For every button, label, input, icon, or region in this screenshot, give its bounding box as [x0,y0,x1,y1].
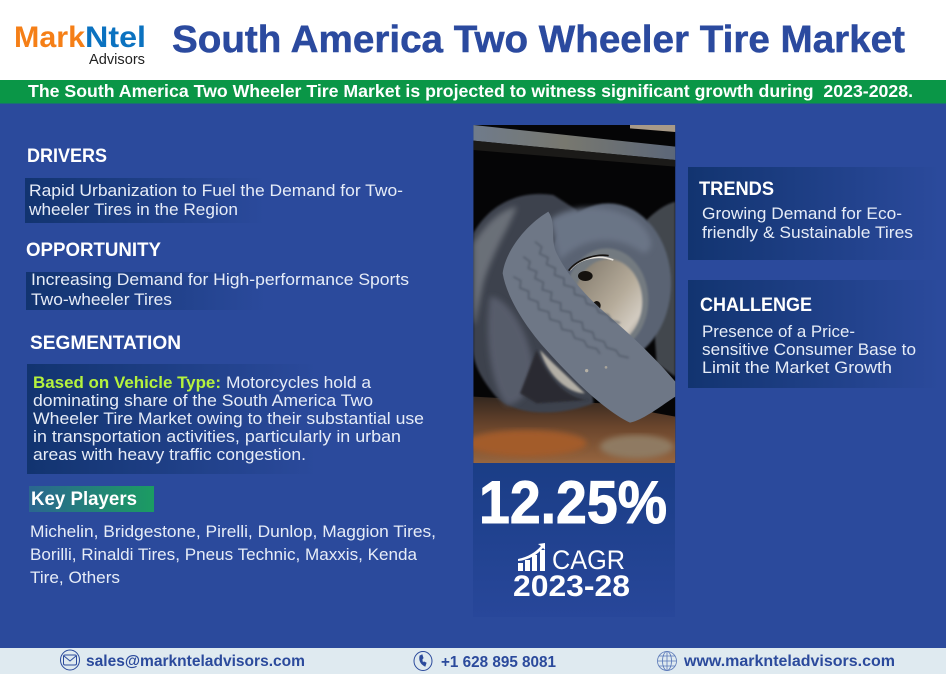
text: website: www.marknteladvisors.com [683,653,895,670]
text: drivers body: wheeler Tires in the Region [28,200,238,219]
text: phone: +1 628 895 8081 [441,654,556,671]
panel: CAGR stat [473,463,675,617]
icon: email [60,650,80,670]
icon: phone [414,652,432,670]
heading: segmentation: SEGMENTATION [30,333,181,354]
logo: MarkNtel Advisors: Mark [14,21,85,54]
text: opportunity body [31,270,409,309]
text: key players list: Borilli, Rinaldi Tires, Pneus Technic, Maxxis, Kenda [30,545,418,564]
text: key players list [30,522,436,587]
panel: trends [688,167,940,260]
logo: MarkNtel Advisors: Advisors [89,51,145,68]
subtitle banner: The South America Two Wheeler Tire Market is projected to witness significant growth during 2023-2028. [28,81,913,101]
logo: MarkNtel Advisors: Ntel [85,21,146,54]
panel: segmentation [27,333,424,474]
text: key players list: Tire, Others [30,568,120,587]
heading: opportunity: OPPORTUNITY [26,240,161,261]
text: challenge body: Presence of a Price- [702,322,855,341]
panel: challenge [688,280,940,388]
heading: key players [29,486,154,512]
icon: growth chart [518,543,545,571]
text: segmentation body: in transportation activities, particularly in urban [33,427,401,446]
logo: MarkNtel Advisors [14,21,146,68]
text: segmentation body: Based on Vehicle Type: [33,373,221,392]
title: South America Two Wheeler Tire Market [172,19,905,61]
heading: drivers: DRIVERS [27,146,107,167]
panel: key players [29,486,436,587]
text: trends body: Growing Demand for Eco- [702,204,902,223]
text: email: sales@marknteladvisors.com [86,653,305,670]
text: segmentation body [33,373,424,464]
label: 2023-28: 2023-28 [513,570,630,603]
text: trends body: friendly & Sustainable Tires [702,223,913,242]
stat: 12.25%: 12.25% [479,469,667,536]
photo: damaged tire [467,125,675,463]
text: segmentation body: Motorcycles hold a [226,373,372,392]
text: segmentation body: areas with heavy traffic congestion. [33,445,306,464]
heading: challenge: CHALLENGE [700,295,812,316]
panel: drivers [25,146,403,223]
text: trends body [702,204,913,242]
text: opportunity body: Two-wheeler Tires [31,290,172,309]
text: drivers body [28,181,403,219]
icon: globe [658,652,676,670]
text: drivers body: Rapid Urbanization to Fuel the Demand for Two- [29,181,403,200]
text: segmentation body: Wheeler Tire Market owing to their substantial use [33,409,424,428]
footer bar [0,648,946,674]
label: CAGR: CAGR [552,545,625,575]
panel: opportunity [26,240,409,310]
text: challenge body: Limit the Market Growth [702,358,892,377]
text: challenge body: sensitive Consumer Base to [702,340,916,359]
text: key players list: Michelin, Bridgestone, Pirelli, Dunlop, Maggion Tires, [30,522,436,541]
heading: key players: Key Players [31,489,137,510]
text: challenge body [702,322,916,377]
text: opportunity body: Increasing Demand for High-performance Sports [31,270,409,289]
heading: trends: TRENDS [699,179,774,200]
text: segmentation body: dominating share of the South America Two [33,391,373,410]
